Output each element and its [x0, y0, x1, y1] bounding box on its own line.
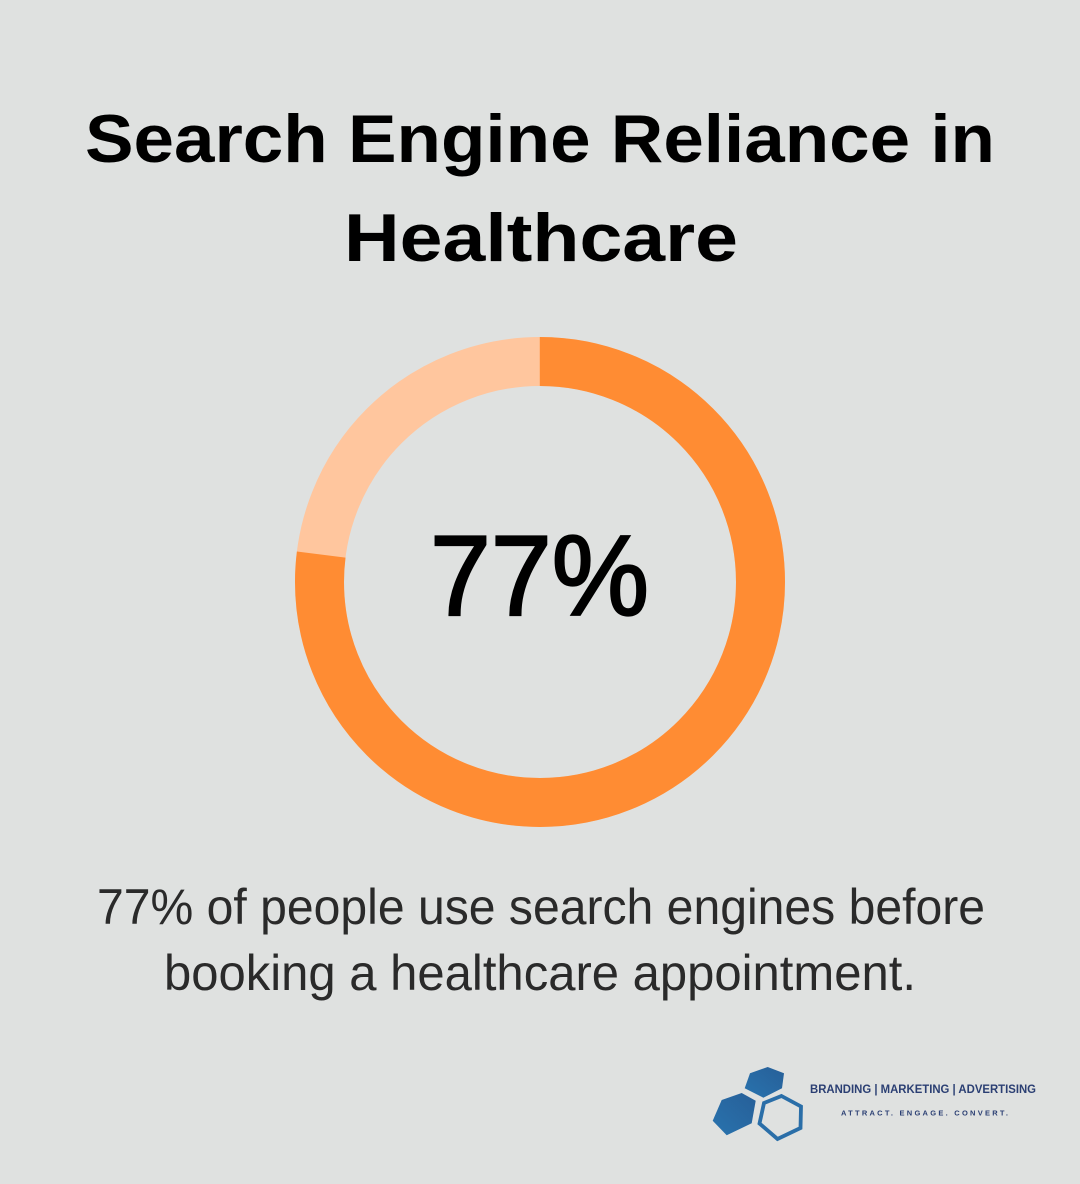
icon: hexagons — [713, 1067, 801, 1139]
logo tagline: BRANDING | MARKETING | ADVERTISING — [810, 1084, 1036, 1096]
logo — [713, 1067, 1036, 1139]
big percentage: 77% — [430, 513, 649, 640]
highlighted 77% segment — [320, 362, 760, 802]
description text: booking a healthcare appointment. — [164, 945, 916, 1001]
remaining 23% segment — [320, 362, 760, 802]
logo tagline — [810, 1084, 1036, 1118]
title: Healthcare — [344, 200, 738, 276]
description text — [97, 879, 985, 1001]
donut chart: 77% — [320, 362, 760, 802]
description text: 77% of people use search engines before — [97, 879, 985, 935]
title — [85, 101, 995, 276]
logo tagline: ATTRACT. ENGAGE. CONVERT. — [841, 1108, 1008, 1118]
title: Search Engine Reliance in — [85, 101, 995, 177]
